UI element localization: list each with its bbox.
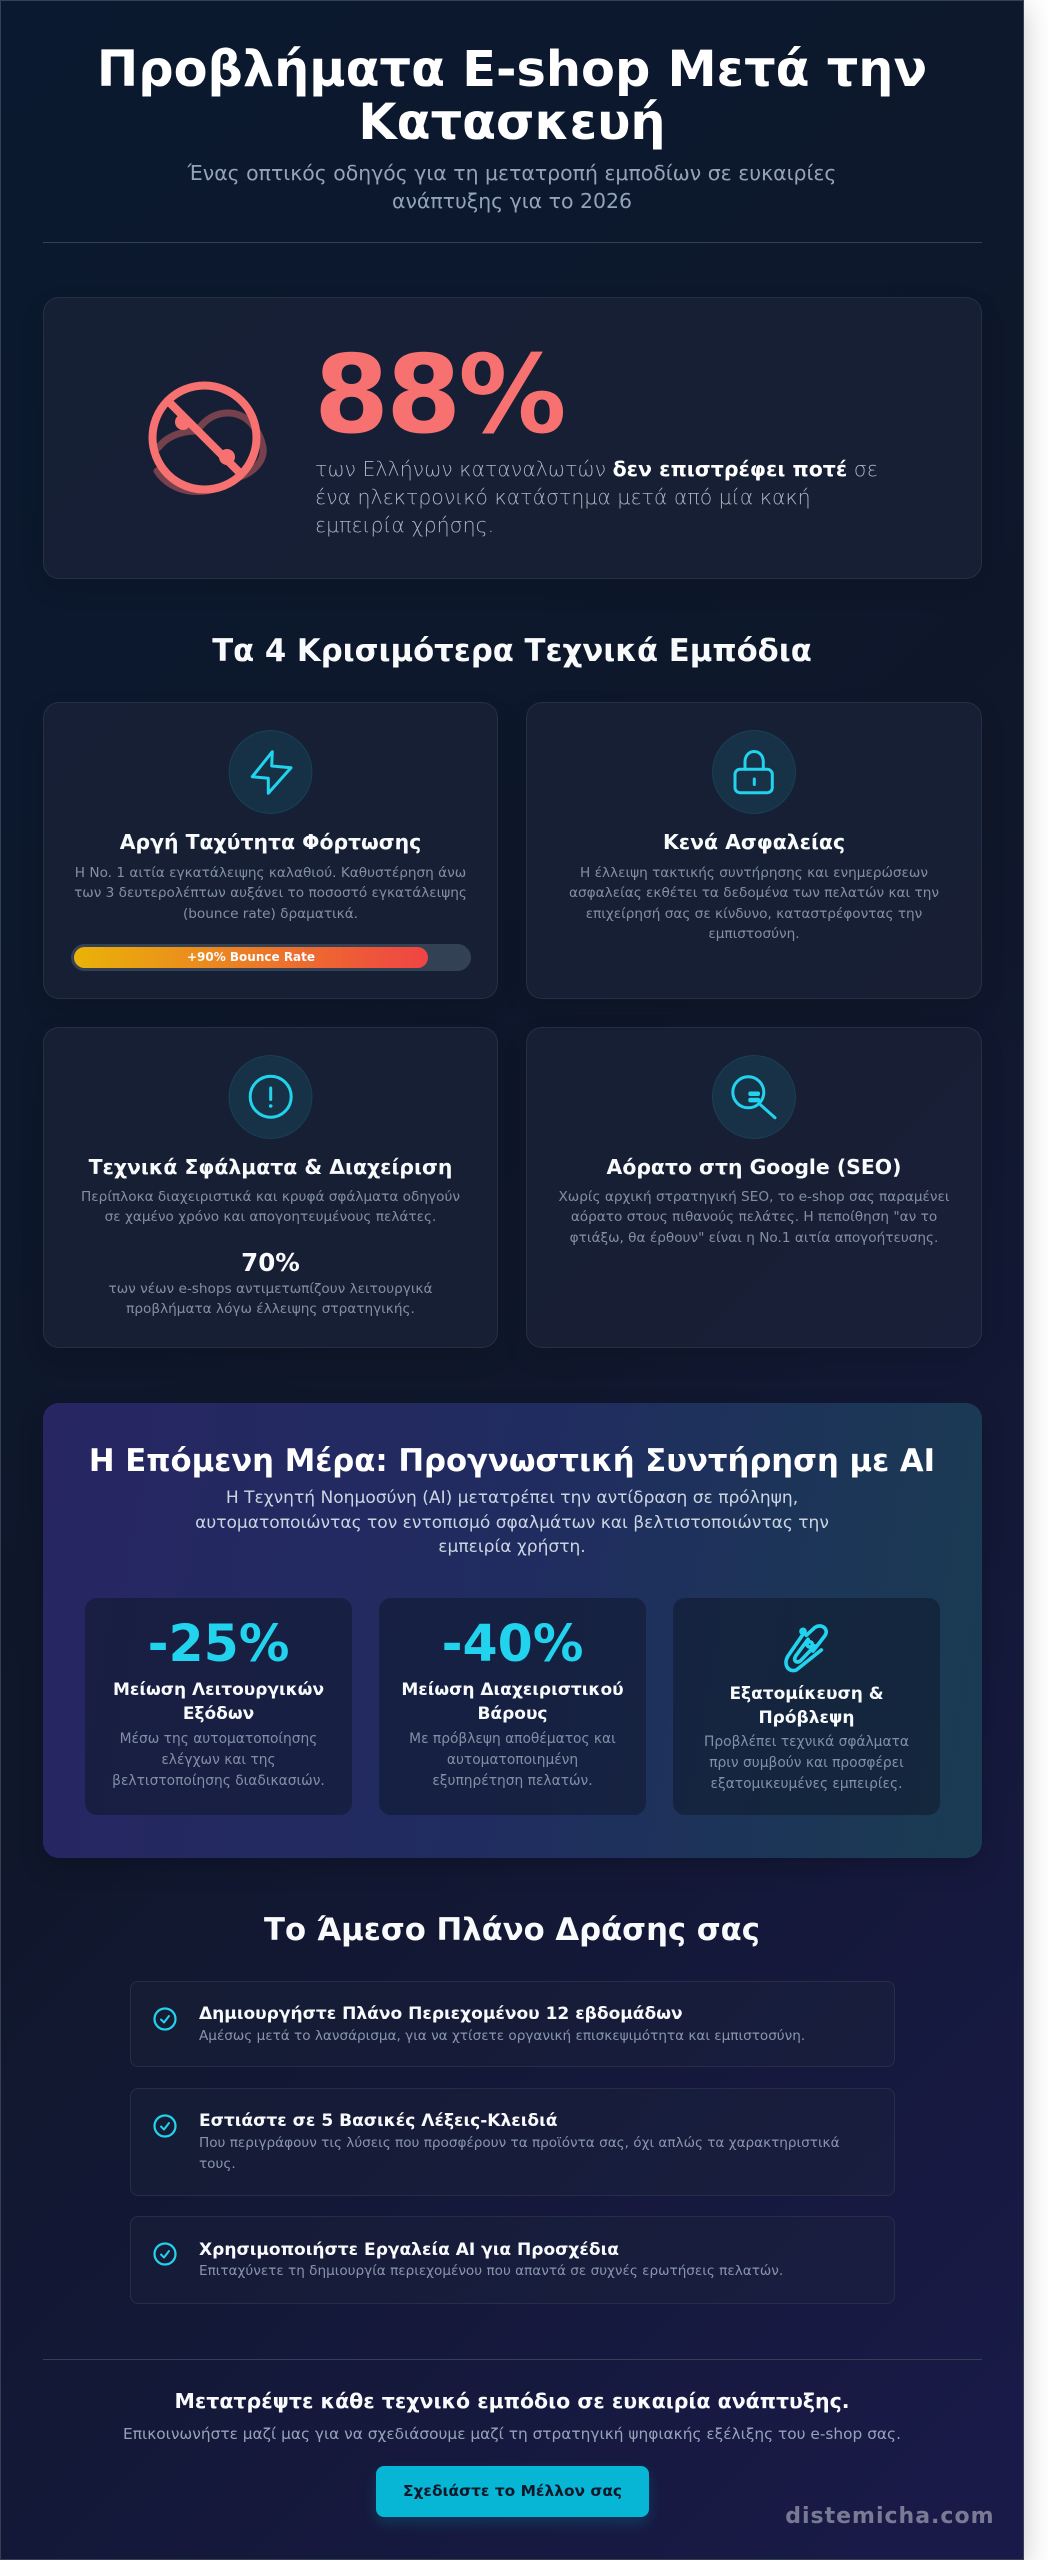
button: Σχεδιάστε το Μέλλον σας <box>403 2482 622 2500</box>
action item 2 <box>130 2088 895 2196</box>
big number 88%: 88% <box>314 333 564 458</box>
metric card: operating costs <box>85 1598 352 1815</box>
metric text: αυτοματοποιημένη <box>447 1752 578 1768</box>
icon: padlock <box>712 730 796 814</box>
action 1 title: Δημιουργήστε Πλάνο Περιεχομένου 12 εβδομάδων <box>199 2004 683 2024</box>
metric text: βελτιστοποίησης διαδικασιών. <box>112 1773 325 1789</box>
call to action text: Επικοινωνήστε μαζί μας για να σχεδιάσουμε μαζί τη στρατηγική ψηφιακής εξέλιξης του e-shop σας. <box>123 2425 901 2443</box>
icon: check circle <box>153 2007 177 2031</box>
icon: check circle <box>153 2114 177 2138</box>
card text: errors: Περίπλοκα διαχειριστικά και κρυφά σφάλματα οδηγούν <box>81 1189 460 1205</box>
icon: magnifier <box>712 1055 796 1139</box>
card text: seo <box>558 1189 950 1246</box>
value -40%: -40% <box>442 1614 583 1673</box>
metric text: Προβλέπει τεχνικά σφάλματα <box>704 1734 909 1750</box>
subtitle: Ένας οπτικός οδηγός για τη μετατροπή εμποδίων σε ευκαιρίες <box>188 161 836 185</box>
card text: slow speed: Η No. 1 αιτία εγκατάλειψης καλαθιού. Καθυστέρηση άνω <box>75 865 466 881</box>
metric card: admin burden <box>379 1598 646 1815</box>
card title: seo: Αόρατο στη Google (SEO) <box>607 1155 901 1179</box>
statistic caption: των νέων e-shops αντιμετωπίζουν λειτουργικά <box>109 1281 432 1297</box>
icon: paperclip <box>784 1624 828 1672</box>
metric text <box>112 1731 325 1789</box>
panel: security gaps <box>526 702 982 999</box>
action 3 text: Επιταχύνετε τη δημιουργία περιεχομένου που απαντά σε συχνές ερωτήσεις πελατών. <box>199 2263 783 2279</box>
panel: invisible on google <box>526 1027 982 1348</box>
metric text: Μέσω της αυτοματοποίησης <box>120 1731 317 1747</box>
metric title: Πρόβλεψη <box>758 1708 855 1728</box>
hero description: εμπειρία χρήσης. <box>315 513 494 537</box>
card title: errors: Τεχνικά Σφάλματα & Διαχείριση <box>89 1155 452 1179</box>
hero description: ένα ηλεκτρονικό κατάστημα μετά από μία κακή <box>315 485 811 509</box>
card text: security: εμπιστοσύνη. <box>708 926 800 942</box>
card text: slow speed: (bounce rate) δραματικά. <box>183 906 358 922</box>
action item 1 <box>130 1981 895 2067</box>
call to action heading: Μετατρέψτε κάθε τεχνικό εμπόδιο σε ευκαιρία ανάπτυξης. <box>174 2389 850 2413</box>
card text: errors: σε χαμένο χρόνο και απογοητευμένους πελάτες. <box>105 1209 436 1225</box>
metric text: ελέγχων και της <box>161 1752 276 1768</box>
action 2 text: Που περιγράφουν τις λύσεις που προσφέρουν τα προϊόντα σας, όχι απλώς τα χαρακτηριστικά <box>199 2135 840 2151</box>
icon: crossed out broken cloud <box>148 382 267 495</box>
metric title <box>113 1680 324 1724</box>
icon: alert circle <box>228 1055 312 1139</box>
metric card: personalization <box>673 1598 940 1815</box>
hero description <box>315 457 878 537</box>
card text: security: ασφαλείας εκθέτει τα δεδομένα των πελατών και την <box>569 885 939 901</box>
icon: lightning bolt <box>228 730 312 814</box>
panel: predictive maintenance with AI <box>43 1403 982 1858</box>
heading: action plan: Το Άμεσο Πλάνο Δράσης σας <box>264 1913 760 1948</box>
title: Προβλήματα E-shop Μετά την <box>97 40 927 98</box>
action 1 text: Αμέσως μετά το λανσάρισμα, για να χτίσετε οργανική επισκεψιμότητα και εμπιστοσύνη. <box>199 2028 805 2044</box>
metric title: Εξατομίκευση & <box>729 1684 884 1704</box>
progress bar: bounce rate: +90% Bounce Rate <box>187 950 315 964</box>
card text: errors <box>81 1189 460 1225</box>
card text: security: επιχείρησή σας σε κίνδυνο, καταστρέφοντας την <box>586 906 922 922</box>
metric text: εξυπηρέτηση πελατών. <box>432 1773 593 1789</box>
card title: security: Κενά Ασφαλείας <box>663 830 845 854</box>
panel: technical errors <box>43 1027 498 1348</box>
heading: critical obstacles: Τα 4 Κρισιμότερα Τεχνικά Εμπόδια <box>212 634 812 668</box>
statistic caption: προβλήματα λόγω έλλειψης στρατηγικής. <box>126 1301 415 1317</box>
panel: hero statistic <box>43 297 982 579</box>
AI intro text: Η Τεχνητή Νοημοσύνη (AI) μετατρέπει την αντίδραση σε πρόληψη, <box>226 1488 798 1508</box>
card text: slow speed <box>74 865 467 922</box>
panel: slow loading speed <box>43 702 498 999</box>
heading: next day: Η Επόμενη Μέρα: Προγνωστική Συντήρηση με AI <box>89 1444 935 1479</box>
statistic 70%: 70% <box>241 1248 300 1277</box>
metric title: Εξόδων <box>183 1704 254 1724</box>
statistic caption <box>109 1281 432 1317</box>
card text: security: Η έλλειψη τακτικής συντήρησης και ενημερώσεων <box>580 865 928 881</box>
value -25%: -25% <box>148 1614 289 1673</box>
AI intro text: αυτοματοποιώντας τον εντοπισμό σφαλμάτων και βελτιστοποιώντας την <box>195 1512 829 1532</box>
AI intro text: εμπειρία χρήστη. <box>438 1537 586 1557</box>
card title: slow speed: Αργή Ταχύτητα Φόρτωσης <box>120 830 421 854</box>
action 2 text <box>199 2135 840 2172</box>
metric text: πριν συμβούν και προσφέρει <box>709 1755 904 1771</box>
card text: seo: αόρατο στους πιθανούς πελάτες. Η πεποίθηση "αν το <box>571 1209 937 1225</box>
card text: slow speed: των 3 δευτερολέπτων αυξάνει το ποσοστό εγκατάλειψης <box>74 885 467 901</box>
action 2 text: τους. <box>199 2156 236 2172</box>
metric title: Μείωση Διαχειριστικού <box>401 1680 624 1700</box>
metric text: εξατομικευμένες εμπειρίες. <box>711 1776 902 1792</box>
metric title: Μείωση Λειτουργικών <box>113 1680 324 1700</box>
progress bar: bounce rate <box>71 944 471 971</box>
metric text: Με πρόβλεψη αποθέματος και <box>409 1731 616 1747</box>
icon: check circle <box>153 2242 177 2266</box>
metric title <box>401 1680 624 1724</box>
metric title: Βάρους <box>477 1704 548 1724</box>
hero description: των Ελλήνων καταναλωτών δεν επιστρέφει ποτέ σε <box>315 457 878 481</box>
action 3 title: Χρησιμοποιήστε Εργαλεία AI για Προσχέδια <box>199 2240 619 2260</box>
title <box>97 40 927 151</box>
metric text <box>409 1731 616 1789</box>
metric text <box>704 1734 909 1792</box>
action item 3 <box>130 2216 895 2304</box>
metric title <box>729 1684 884 1728</box>
subtitle <box>187 161 836 213</box>
card text: seo: Χωρίς αρχική στρατηγική SEO, το e-shop σας παραμένει <box>558 1189 950 1205</box>
title: Κατασκευή <box>358 93 666 151</box>
watermark: distemicha.com <box>785 2504 994 2529</box>
subtitle: ανάπτυξης για το 2026 <box>392 189 632 213</box>
card text: security <box>569 865 939 942</box>
card text: seo: φτιάξω, θα έρθουν" είναι η No.1 αιτία απογοήτευσης. <box>570 1230 938 1246</box>
AI intro text <box>195 1488 829 1557</box>
button <box>376 2466 649 2517</box>
action 2 title: Εστιάστε σε 5 Βασικές Λέξεις-Κλειδιά <box>199 2111 557 2131</box>
